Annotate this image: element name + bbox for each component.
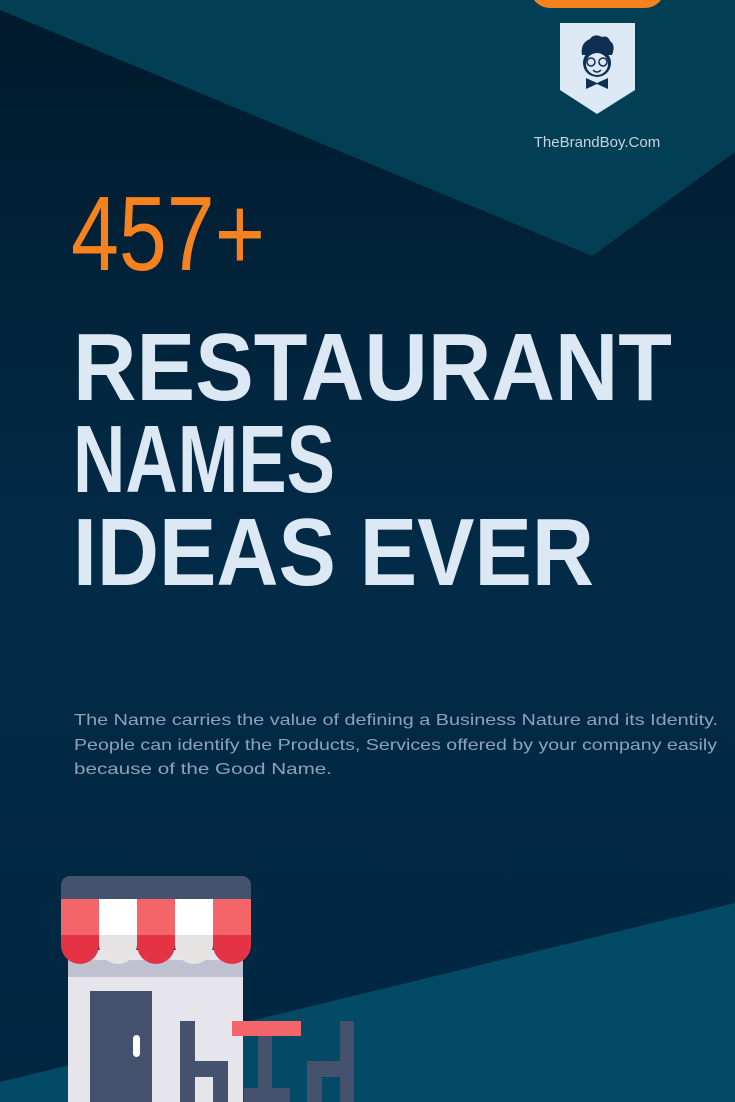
description paragraph: People can identify the Products, Services offered by your company easily — [74, 737, 717, 754]
icon: boy face — [582, 35, 614, 89]
chairs and table — [180, 1021, 354, 1102]
description paragraph: The Name carries the value of defining a Business Nature and its Identity. — [74, 712, 718, 729]
top teal panel — [0, 0, 735, 256]
title: RESTAURANT — [73, 314, 672, 421]
description paragraph: because of the Good Name. — [74, 761, 332, 778]
description paragraph — [74, 712, 718, 778]
illustration: restaurant storefront — [61, 876, 354, 1102]
logo badge — [560, 23, 635, 114]
orange pill — [530, 0, 665, 8]
bottom teal panel — [0, 903, 735, 1102]
title — [73, 314, 672, 606]
title: IDEAS EVER — [73, 499, 594, 606]
title: NAMES — [73, 406, 335, 513]
brand text: TheBrandBoy.Com — [534, 134, 660, 151]
number 457+: 457+ — [71, 175, 265, 293]
